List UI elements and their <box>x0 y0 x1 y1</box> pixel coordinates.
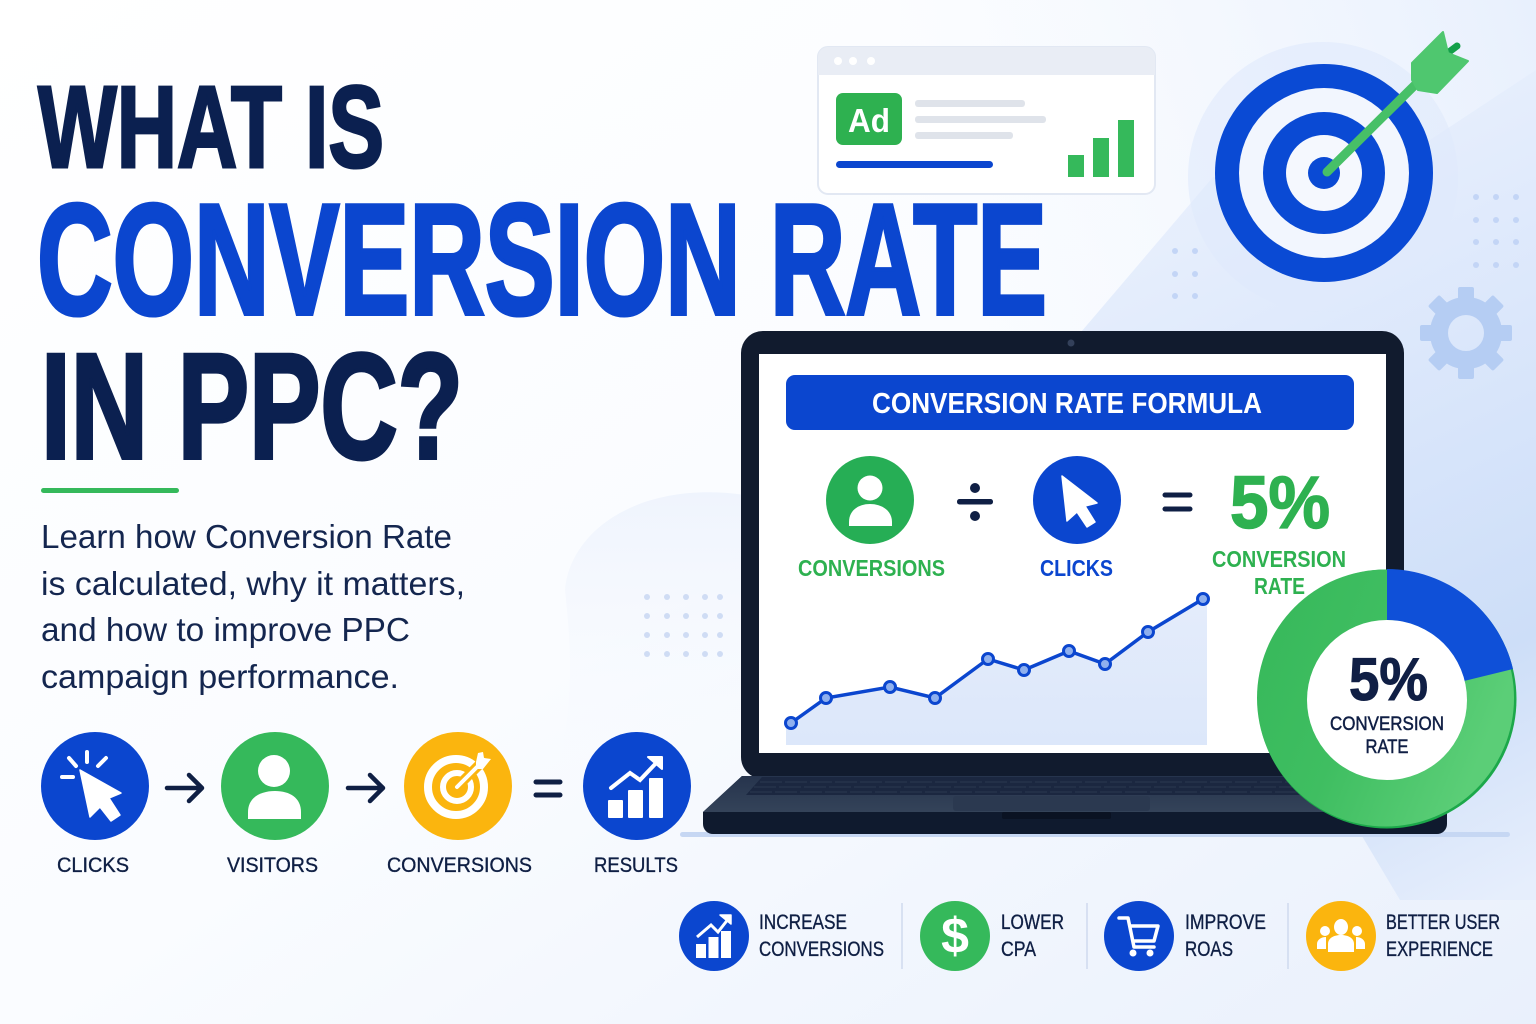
icon: results <box>583 732 691 840</box>
equals sign <box>536 782 560 795</box>
green divider <box>41 488 179 493</box>
title <box>37 62 1047 490</box>
benefit: increase conversions: INCREASE <box>759 911 847 934</box>
icon: visitors <box>221 732 329 840</box>
benefits row <box>679 901 1500 971</box>
description text <box>41 518 465 695</box>
equals sign <box>1165 495 1190 509</box>
description text: and how to improve PPC <box>41 611 410 648</box>
ad card <box>818 47 1155 194</box>
benefit: lower cpa: $ <box>941 908 969 964</box>
mini bars <box>1068 120 1134 177</box>
benefit: improve roas: ROAS <box>1185 938 1233 961</box>
donut chart: CONVERSION <box>1330 713 1444 735</box>
benefit: improve roas <box>1104 901 1266 971</box>
donut chart: RATE <box>1366 736 1408 758</box>
laptop <box>680 331 1510 837</box>
gear icon <box>1420 287 1512 379</box>
dot grid middle <box>644 594 723 657</box>
description text: campaign performance. <box>41 658 399 695</box>
icon: clicks <box>41 732 149 840</box>
formula heading <box>786 375 1354 430</box>
arrow <box>167 775 202 801</box>
divide sign <box>957 483 993 521</box>
dot grid right <box>1172 194 1519 299</box>
icon: clicks cursor <box>1033 456 1121 544</box>
benefit: better user experience <box>1306 901 1500 971</box>
benefit: increase conversions <box>679 901 884 971</box>
benefit: increase conversions: CONVERSIONS <box>759 938 884 961</box>
benefit: lower cpa: CPA <box>1001 938 1036 961</box>
description text: Learn how Conversion Rate <box>41 518 452 555</box>
donut chart <box>1257 569 1516 828</box>
formula labels: CLICKS <box>1040 555 1113 581</box>
benefit: better user experience: EXPERIENCE <box>1386 938 1493 961</box>
flow labels: VISITORS <box>227 854 318 877</box>
ad badge: Ad <box>848 102 890 139</box>
panel: formula <box>786 375 1354 599</box>
flow labels: RESULTS <box>594 854 678 877</box>
flow labels <box>57 854 678 877</box>
formula labels <box>798 546 1346 599</box>
benefit: lower cpa: LOWER <box>1001 911 1064 934</box>
target icon <box>1188 32 1468 312</box>
flow labels: CLICKS <box>57 854 129 877</box>
formula heading: CONVERSION RATE FORMULA <box>872 388 1262 420</box>
title: CONVERSION RATE <box>37 172 1047 348</box>
arrow <box>348 775 383 801</box>
donut chart: 5% <box>1349 646 1428 713</box>
benefit: better user experience: BETTER USER <box>1386 911 1500 934</box>
title: IN PPC? <box>41 322 463 490</box>
ad badge <box>836 93 902 145</box>
formula labels: CONVERSIONS <box>798 555 945 581</box>
formula labels: RATE <box>1254 573 1305 599</box>
title: WHAT IS <box>38 62 384 192</box>
description text: is calculated, why it matters, <box>41 565 465 602</box>
benefit: lower cpa <box>920 901 1064 971</box>
line chart <box>786 594 1208 745</box>
formula labels: CONVERSION <box>1212 546 1346 572</box>
icon: conversions person <box>826 456 914 544</box>
result 5%: 5% <box>1230 461 1330 544</box>
benefit: improve roas: IMPROVE <box>1185 911 1266 934</box>
flow labels: CONVERSIONS <box>387 854 532 877</box>
icon: conversions <box>404 732 512 840</box>
process flow <box>41 732 691 877</box>
